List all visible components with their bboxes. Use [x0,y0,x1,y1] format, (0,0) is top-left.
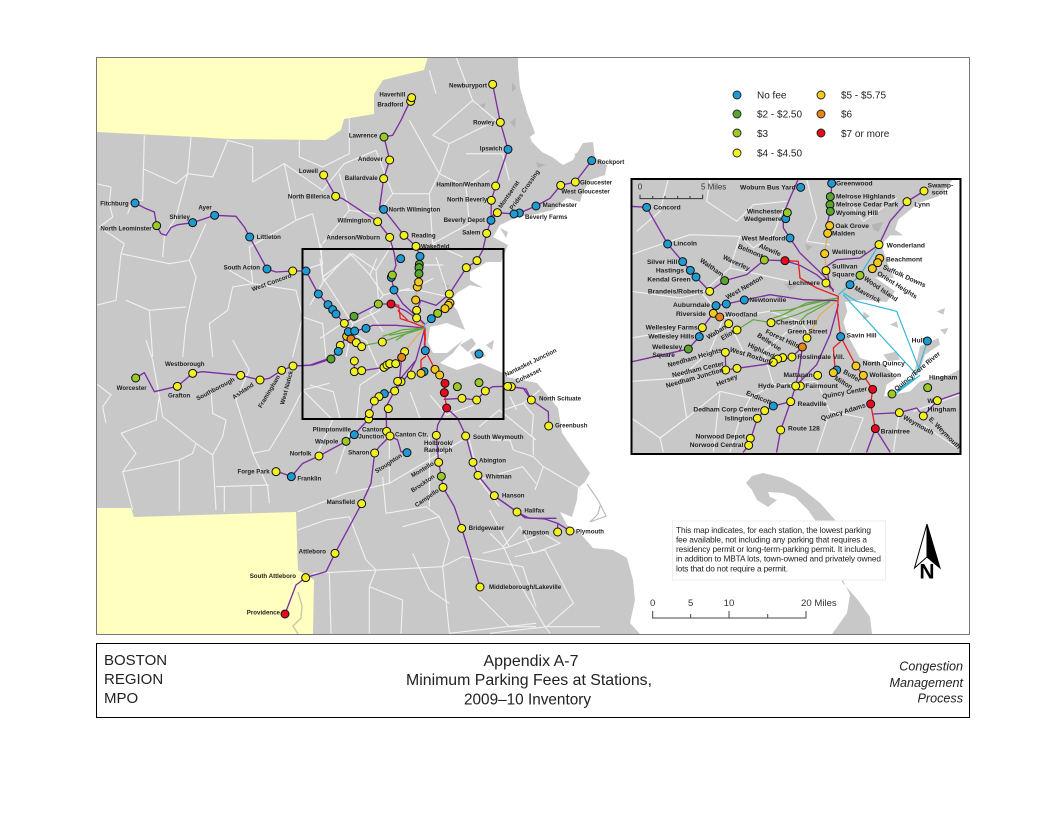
legend: $3 [733,129,769,140]
legend: $5 to $5.75 [817,90,886,102]
inset station labels: Savin Hill [847,332,877,339]
legend: $6: $6 [841,110,853,120]
station labels south shore: North Scituate [539,395,582,402]
station labels north: North Wilmington [389,207,440,214]
station labels north: Anderson/Woburn [326,234,380,241]
inset station labels: Hingham [928,407,956,414]
inset station labels: Endicott [745,390,773,407]
inset station labels: Highland [746,342,775,360]
rail lines south main map [136,330,556,614]
legend: $3: $3 [757,129,769,140]
legend: no fee: No fee [757,90,787,102]
station labels south: Holbrook/ [424,440,453,447]
agency name: REGION [104,671,163,688]
inset station labels: Silver Hill [647,259,677,266]
station labels south: Westborough [165,361,205,368]
station labels north: North Leominster [100,225,152,232]
coastal marshes [442,82,546,305]
inset station labels: E. Weymouth [927,416,962,451]
scale bar: 0 [650,598,655,609]
inset station labels: Oak Grove [835,223,869,230]
inset station labels: Quincy/Fore River [893,350,942,393]
station labels north: Beverly Depot [444,217,485,224]
scale bar: 20 Miles [801,598,837,609]
inset station labels: Mattapan [783,372,813,379]
station labels south: Southborough [195,376,236,402]
station labels north: Rowley [473,119,495,126]
inset station labels: North Quincy [863,360,905,367]
station labels south: Canton [362,426,383,433]
stations and labels south shore [504,347,604,536]
note explaining the map: lots that do not require a permit. [676,563,788,573]
inset station labels: Hull [912,338,924,345]
inset station labels: Hersey [715,373,739,388]
station labels south: Providence [247,609,281,616]
inset water [843,179,959,396]
legend: no fee [733,90,787,102]
inset islands [863,308,948,375]
station labels south: Forge Park [237,469,270,476]
inset station labels: Hingham [929,374,958,381]
inset frame [632,179,960,454]
inset station labels: Wonderland [887,242,925,249]
station labels south: Plimptonville [313,427,352,434]
north arrow: N [919,560,935,584]
inset station labels: Melrose Cedar Park [836,202,898,209]
title: Minimum Parking Fees at Stations, [406,672,652,689]
station labels south: Norfolk [290,451,312,458]
inset station labels: Alewife [758,243,782,258]
inset station labels: Lynn [914,201,930,208]
station labels south: Ashland [231,381,255,401]
station labels south: Randolph [424,447,453,454]
inset station labels: Route 128 [788,426,820,433]
town boundaries southeast [490,390,600,633]
program name: Congestion [899,660,963,674]
station labels north: Ayer [198,205,212,212]
station labels south: Junction [358,433,384,440]
station labels south: Framingham [257,374,282,409]
rail lines south shore [494,387,570,532]
inset station labels: Wedgemere [744,216,782,223]
station labels north: Salem [462,230,481,237]
inset station labels: Fairmount [805,383,839,390]
station labels south: West Natick [279,370,295,406]
Narragansett river [293,592,302,634]
stations and labels south [117,347,562,618]
inset station labels: Wellington [832,249,866,256]
inset station labels [646,180,962,451]
scale bar [650,598,837,618]
station markers north [131,80,512,363]
inset station labels: Hastings [656,268,684,275]
inset station labels: Milton [833,375,853,391]
station labels north: Ipswich [480,146,503,153]
inset station labels: Woodland [725,311,757,318]
station labels south: Whitman [486,473,512,480]
note explaining the map: residency permit or long-term-parking permit. It includes, [676,544,876,554]
station labels north: Hamilton/Wenham [436,182,491,189]
inset background land [631,179,960,454]
rail line Rockport [491,161,592,220]
inset station labels: scott [932,190,948,197]
station labels south: Worcester [117,385,147,392]
inset station labels: Bellevue [756,332,783,353]
inset station labels: Belmont [737,243,765,261]
station labels Cape Ann: West Gloucester [561,188,610,195]
station labels south shore: Halifax [524,508,545,515]
program name: Management [889,676,963,690]
station labels south: Brockton [410,473,436,494]
inset scale bar: 5 Miles [701,182,726,191]
legend: $7 or more [817,129,890,140]
inset station labels: Readville [798,401,827,408]
agency name: BOSTON [104,652,167,669]
station labels south shore: Kingston [522,529,549,536]
inset station labels: Norwood Depot [695,433,746,440]
inset station labels: Square [652,352,675,359]
inset station labels: West Roxbury [729,347,774,366]
station labels north: Prides Crossing [509,169,542,211]
station labels south: Stoughton [374,452,404,475]
inset station labels: Wyoming Hill [836,210,878,217]
agency name: MPO [104,690,138,707]
map frame [96,58,970,634]
agency name [104,652,167,707]
inset station labels: W. [927,398,935,405]
stations and labels Cape Ann [510,157,624,221]
station labels north: Wakefield [421,244,450,251]
inset station labels: Chestnut Hill [776,320,817,327]
title: 2009–10 Inventory [464,692,591,708]
town boundaries south half [96,340,536,633]
inset station labels: Newtonville [749,297,787,304]
inset station labels: West Newton [725,274,764,301]
station labels south: Canton Ctr. [395,432,428,439]
inset station labels: Wellesley Hills [648,334,695,341]
station labels Cape Ann: Beverly Farms [525,214,568,221]
inset station labels: Needham Heights [667,347,723,369]
station labels south [117,361,562,616]
inset station labels: Weymouth [902,414,935,437]
inset station labels: Waltham [698,257,725,279]
inset scale bar [638,182,726,199]
legend: $4 to $4.50: $4 - $4.50 [757,148,802,160]
commuter rail lines north [135,84,508,366]
inset station labels: Swamp- [928,182,953,189]
legend: $5 to $5.75: $5 - $5.75 [841,90,886,102]
inset station labels: Needham Junction [665,367,724,390]
program name: Process [918,692,964,706]
stations and labels north [100,80,542,363]
station labels south: Sharon [348,449,370,456]
legend: $7 or more: $7 or more [841,129,890,140]
legend: $6 [817,110,853,120]
station labels south: Grafton [168,393,190,400]
inset station labels: Melrose Highlands [836,194,895,201]
inset station labels: Wollaston [869,372,901,379]
note explaining the map: This map indicates, for each station, the lowest parking [676,525,871,535]
inset station labels: Quincy Center [822,386,868,401]
Rhode Island area [96,508,314,634]
station labels south: Bridgewater [469,525,505,532]
title [406,653,652,708]
inset station labels: Forest Hills [764,328,800,350]
station labels south shore: Cohasset [514,367,542,385]
station labels north: Haverhill [379,92,406,99]
inset station labels: Wood Island [862,276,899,303]
inset station labels: Square [832,272,855,279]
station labels Cape Ann: Gloucester [580,180,613,187]
station labels south: Franklin [297,475,322,482]
station labels south: Attleboro [299,548,326,555]
inset town boundaries [631,179,959,452]
inset station labels: West Medford [741,235,785,242]
station labels Cape Ann [525,159,624,221]
scale bar: 10 [724,598,734,609]
note explaining the map: in addition to MBTA lots, town-owned and privately owned [676,554,881,564]
station labels north: Reading [411,233,436,240]
station labels north: West Concord [251,272,293,293]
station labels north: Wilmington [338,217,371,224]
inset station labels: Islington [725,416,753,423]
inset station labels: Maverick [853,285,882,305]
station markers south [132,347,521,618]
station labels south shore [504,347,604,536]
inset station labels: Sullivan [832,264,858,271]
station labels south: Walpole [315,438,339,445]
town boundaries north half [96,57,509,357]
inset station labels: Kendal Green [647,276,691,283]
station labels north: North Billerica [288,194,331,201]
title block frame [96,644,970,718]
station markers south shore [527,396,574,536]
inset map of Boston area [631,179,962,454]
harbor islands and marsh [446,150,582,360]
inset transit lines [802,226,838,347]
transit lines at Boston hub [362,274,431,357]
Boston area locator rectangle [302,249,504,419]
station labels south: South Attleboro [250,573,296,580]
inset station labels: Brandeis/Roberts [648,288,704,295]
station labels south: Abington [479,457,506,464]
legend: $2 to $2.50 [733,110,802,120]
program name [889,660,964,706]
station labels south: Mansfield [327,499,355,506]
station labels north: Montserrat [497,180,521,210]
station labels south shore: Plymouth [576,528,604,535]
station labels Cape Ann: Manchester [543,202,577,209]
station labels north: Newburyport [449,83,487,90]
title: Appendix A-7 [484,653,579,670]
station labels Cape Ann: Rockport [597,159,624,166]
inset scale bar: 0 [638,182,643,191]
station labels north [100,83,542,293]
station markers Cape Ann [510,157,596,218]
station labels south shore: Nantasket Junction [504,347,558,378]
inset station labels: Greenwood [836,180,873,187]
inset station labels: Lincoln [673,241,697,248]
inset station labels: Winchester [747,208,783,215]
inset station labels: Roslindale Vill. [797,354,845,361]
inset station labels: Malden [832,231,855,238]
station labels north: Ballardvale [345,175,378,182]
inset station labels: Green Street [787,328,828,335]
inset station labels: Hyde Park [758,383,791,390]
station labels north: Shirley [169,214,191,221]
station labels south: Middleborough/Lakeville [489,584,562,591]
inset station labels: Wellesley Farms [646,325,698,332]
scale bar: 5 [688,598,693,609]
inset station labels: Woburn Bus Yard [740,184,796,191]
legend [733,90,890,160]
Duxbury beach spit [587,484,606,522]
legend: $4 to $4.50 [733,148,802,160]
inset station labels: Orient Heights [876,270,918,301]
station labels south: Campello [414,487,441,509]
inset station labels: Waverley [721,254,751,273]
inset station labels: Braintree [881,429,910,436]
inset station labels: Riverside [676,311,706,318]
note explaining the map: fee available, not including any parking that requires a [676,535,867,545]
inset station markers [643,179,941,449]
inset station labels: Waban [706,324,728,341]
legend: $2 to $2.50: $2 - $2.50 [757,110,802,120]
inset station labels: Auburndale [673,302,710,309]
station labels north: Littleton [257,234,281,241]
station labels north: Lawrence [349,133,378,140]
inset station labels: Norwood Central [690,442,743,449]
station labels south: Hanson [502,492,525,499]
station labels south shore: Greenbush [555,422,588,429]
station labels north: Bradford [377,101,404,108]
inset marsh [784,222,883,291]
inset station labels: Lechmere [789,280,820,287]
rail network main map north [135,84,508,366]
note explaining the map [672,521,886,580]
inset station labels: Wellesley [652,344,683,351]
inset station labels: Suffolk Downs [882,264,927,289]
station labels north: Andover [358,156,384,163]
inset station labels: Quincy Adams [820,402,867,423]
inset station labels: Butler [842,369,862,385]
station labels north: Lowell [299,168,318,175]
station labels south: Montello [410,460,436,479]
station labels south: South Weymouth [473,434,524,441]
station labels north: South Acton [224,264,260,271]
station labels north: Fitchburg [100,200,129,207]
inset station labels: Concord [653,205,681,212]
inset station labels: Dedham Corp Center [693,407,760,414]
station labels north: North Beverly [447,197,488,204]
inset station labels: Needham Center [672,360,725,379]
inset station labels: Beachmont [886,256,923,263]
map land: Massachusetts mainland [96,57,640,634]
inset station labels: Eliot [720,328,737,342]
Cape Cod land [746,473,872,634]
north arrow [914,524,940,584]
New Hampshire area [96,57,428,140]
town boundaries inside Boston box [310,253,473,418]
